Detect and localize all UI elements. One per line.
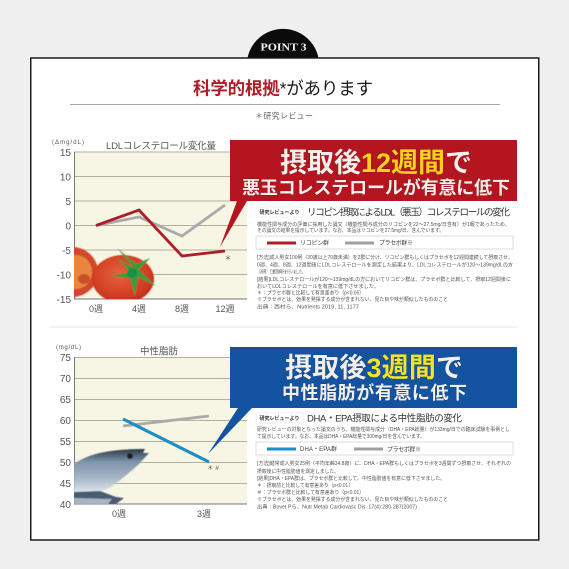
x axis labels: 4週 [132,304,146,314]
x axis labels: 0週 [89,304,103,314]
study summary: その論文の結果を提示しています。なお、本品はリコピンを27.5mg/日、含んでいます。 [257,227,444,234]
y axis labels: 10 [60,172,71,184]
y axis labels: 65 [60,395,71,406]
study notes: 摂取後に中性脂肪値を測定しました。 [257,468,339,475]
x axis labels [89,304,235,314]
legend [256,236,513,249]
study notes: ※プラセボとは、効果を発揮する成分が含まれない、見た目や味が類似したもののこと [257,296,448,303]
chart: triglycerides [56,345,247,519]
study summary [257,221,510,234]
x axis labels [112,509,211,519]
y axis labels: 70 [60,374,71,385]
banner headline: 摂取後12週間で [280,148,472,178]
y axis labels [57,148,71,306]
study notes: （36例）で層別解析を行いました。 [257,268,305,276]
icon: tuna [74,449,149,504]
significance marks: ＊ # [207,465,219,472]
y axis labels: -10 [57,270,71,282]
y axis labels: 15 [60,148,71,159]
study summary [257,426,510,440]
study notes: ※プラセボとは、効果を発揮する成分が含まれない、見た目や味が類似したもののこと [257,496,448,503]
review tag: 研究レビューより [260,415,299,422]
y axis labels: 0 [65,222,71,232]
y axis labels: 5 [65,197,71,208]
study block: DHA EPA [256,412,513,510]
asterisk: ＊ [224,255,232,262]
blue line: DHA EPA group [123,419,209,462]
legend: リコピン群 [300,239,329,247]
banner subline: 悪玉コレステロールが有意に低下 [242,177,510,198]
study notes: [結果]LDLコレステロールが120～139mg/dLの方においてリコピン群は、プラセボ群と比較して、摂取12週間後に [257,276,511,283]
study notes: ＊：プラセボ群と比較して有意差あり（p<0.05） [257,290,364,296]
review tag [256,207,303,217]
y axis labels: 75 [60,353,71,364]
study notes: ＃：プラセボ群と比較して有意差あり（p<0.01） [257,489,364,496]
chart title: LDLコレステロール変化量 [106,140,216,152]
study notes: 出典：西村ら、Nutrients 2019, 11, 1177 [257,304,359,310]
banner headline: 摂取後3週間で [285,353,463,383]
red line: lycopene group [96,205,225,256]
legend: DHA・EPA群 [300,445,337,453]
red callout banner [220,140,517,247]
study notes [257,460,511,510]
POINT 3 badge [248,29,318,58]
study heading: DHA・EPA摂取による中性脂肪の変化 [307,412,462,424]
legend [256,442,513,455]
study summary: 機能性関与成分の評価に採用した論文（機能性関与成分のリコピンを22～27.5mg/日含有）が1報であったため、 [257,221,510,228]
y axis labels: 60 [60,416,71,427]
y axis labels: -5 [62,246,71,257]
subtitle: ＊研究レビュー [255,110,313,120]
review tag: 研究レビューより [260,209,299,216]
study notes: [方法]健常成人男女25例（平均年齢34.8歳）に、DHA・EPA群もしくはプラセボを3週間ずつ摂取させ、それぞれの [257,460,511,467]
y axis labels: 40 [60,500,71,511]
study notes: [方法]成人男女100例（30歳以上70歳未満）を2群に分け、リコピン群もしくはプラセボを12週間連続して摂取させ、 [257,254,513,261]
review tag [256,413,303,423]
blue callout banner [208,347,517,454]
y axis labels: -15 [57,295,71,306]
study heading: リコピン摂取によるLDL（悪玉）コレステロールの変化 [307,206,510,218]
chart: LDL cholesterol change [46,140,247,314]
y axis labels: 55 [60,437,71,448]
gray line: placebo group [123,416,209,426]
study notes: 0週、4週、8週、12週間後にLDLコレステロールを測定した結果より、LDLコレステロールが120～139mg/dLの方 [257,262,513,268]
study notes: 出典：Bovet Pら、Nutr Metab Cardiovasc Dis. 17(4):280-287(2007) [257,504,417,510]
study notes [257,254,513,310]
study notes: おいてLDLコレステロールを有意に低下させました。 [257,283,379,290]
icon: tomatoes [74,246,156,299]
y axis labels: 45 [60,479,71,490]
x axis labels: 8週 [175,304,189,314]
chart unit: (mg/dL) [56,345,81,351]
x axis labels: 0週 [112,509,126,519]
chart unit: (Δmg/dL) [52,140,84,146]
chart title: 中性脂肪 [140,346,178,358]
y axis labels [60,353,71,511]
legend: プラセボ群※ [379,239,413,247]
study notes: [結果]DHA・EPA群は、プラセボ群と比較して、中性脂肪値を有意に低下させました。 [257,475,445,482]
y axis labels: 50 [60,458,71,469]
main panel [31,58,539,540]
POINT 3 badge: POINT 3 [260,42,306,54]
x axis labels: 3週 [197,509,211,519]
title: 科学的根拠*があります [193,78,373,98]
study summary: 研究レビューの対象となった論文のうち、機能性関与成分（DHA・EPA総量）が133mg/日での臨床試験を事例とし [257,426,510,433]
x axis labels: 12週 [215,304,235,314]
banner subline: 中性脂肪が有意に低下 [282,382,467,403]
legend: プラセボ群※ [387,446,421,454]
study summary: て提示しています。なお、本品はDHA・EPA総量で300mg/日を含んでいます。 [257,433,425,440]
study block: lycopene [256,206,513,310]
study notes: ＊：摂取前と比較して有意差あり（p<0.01） [257,482,353,489]
